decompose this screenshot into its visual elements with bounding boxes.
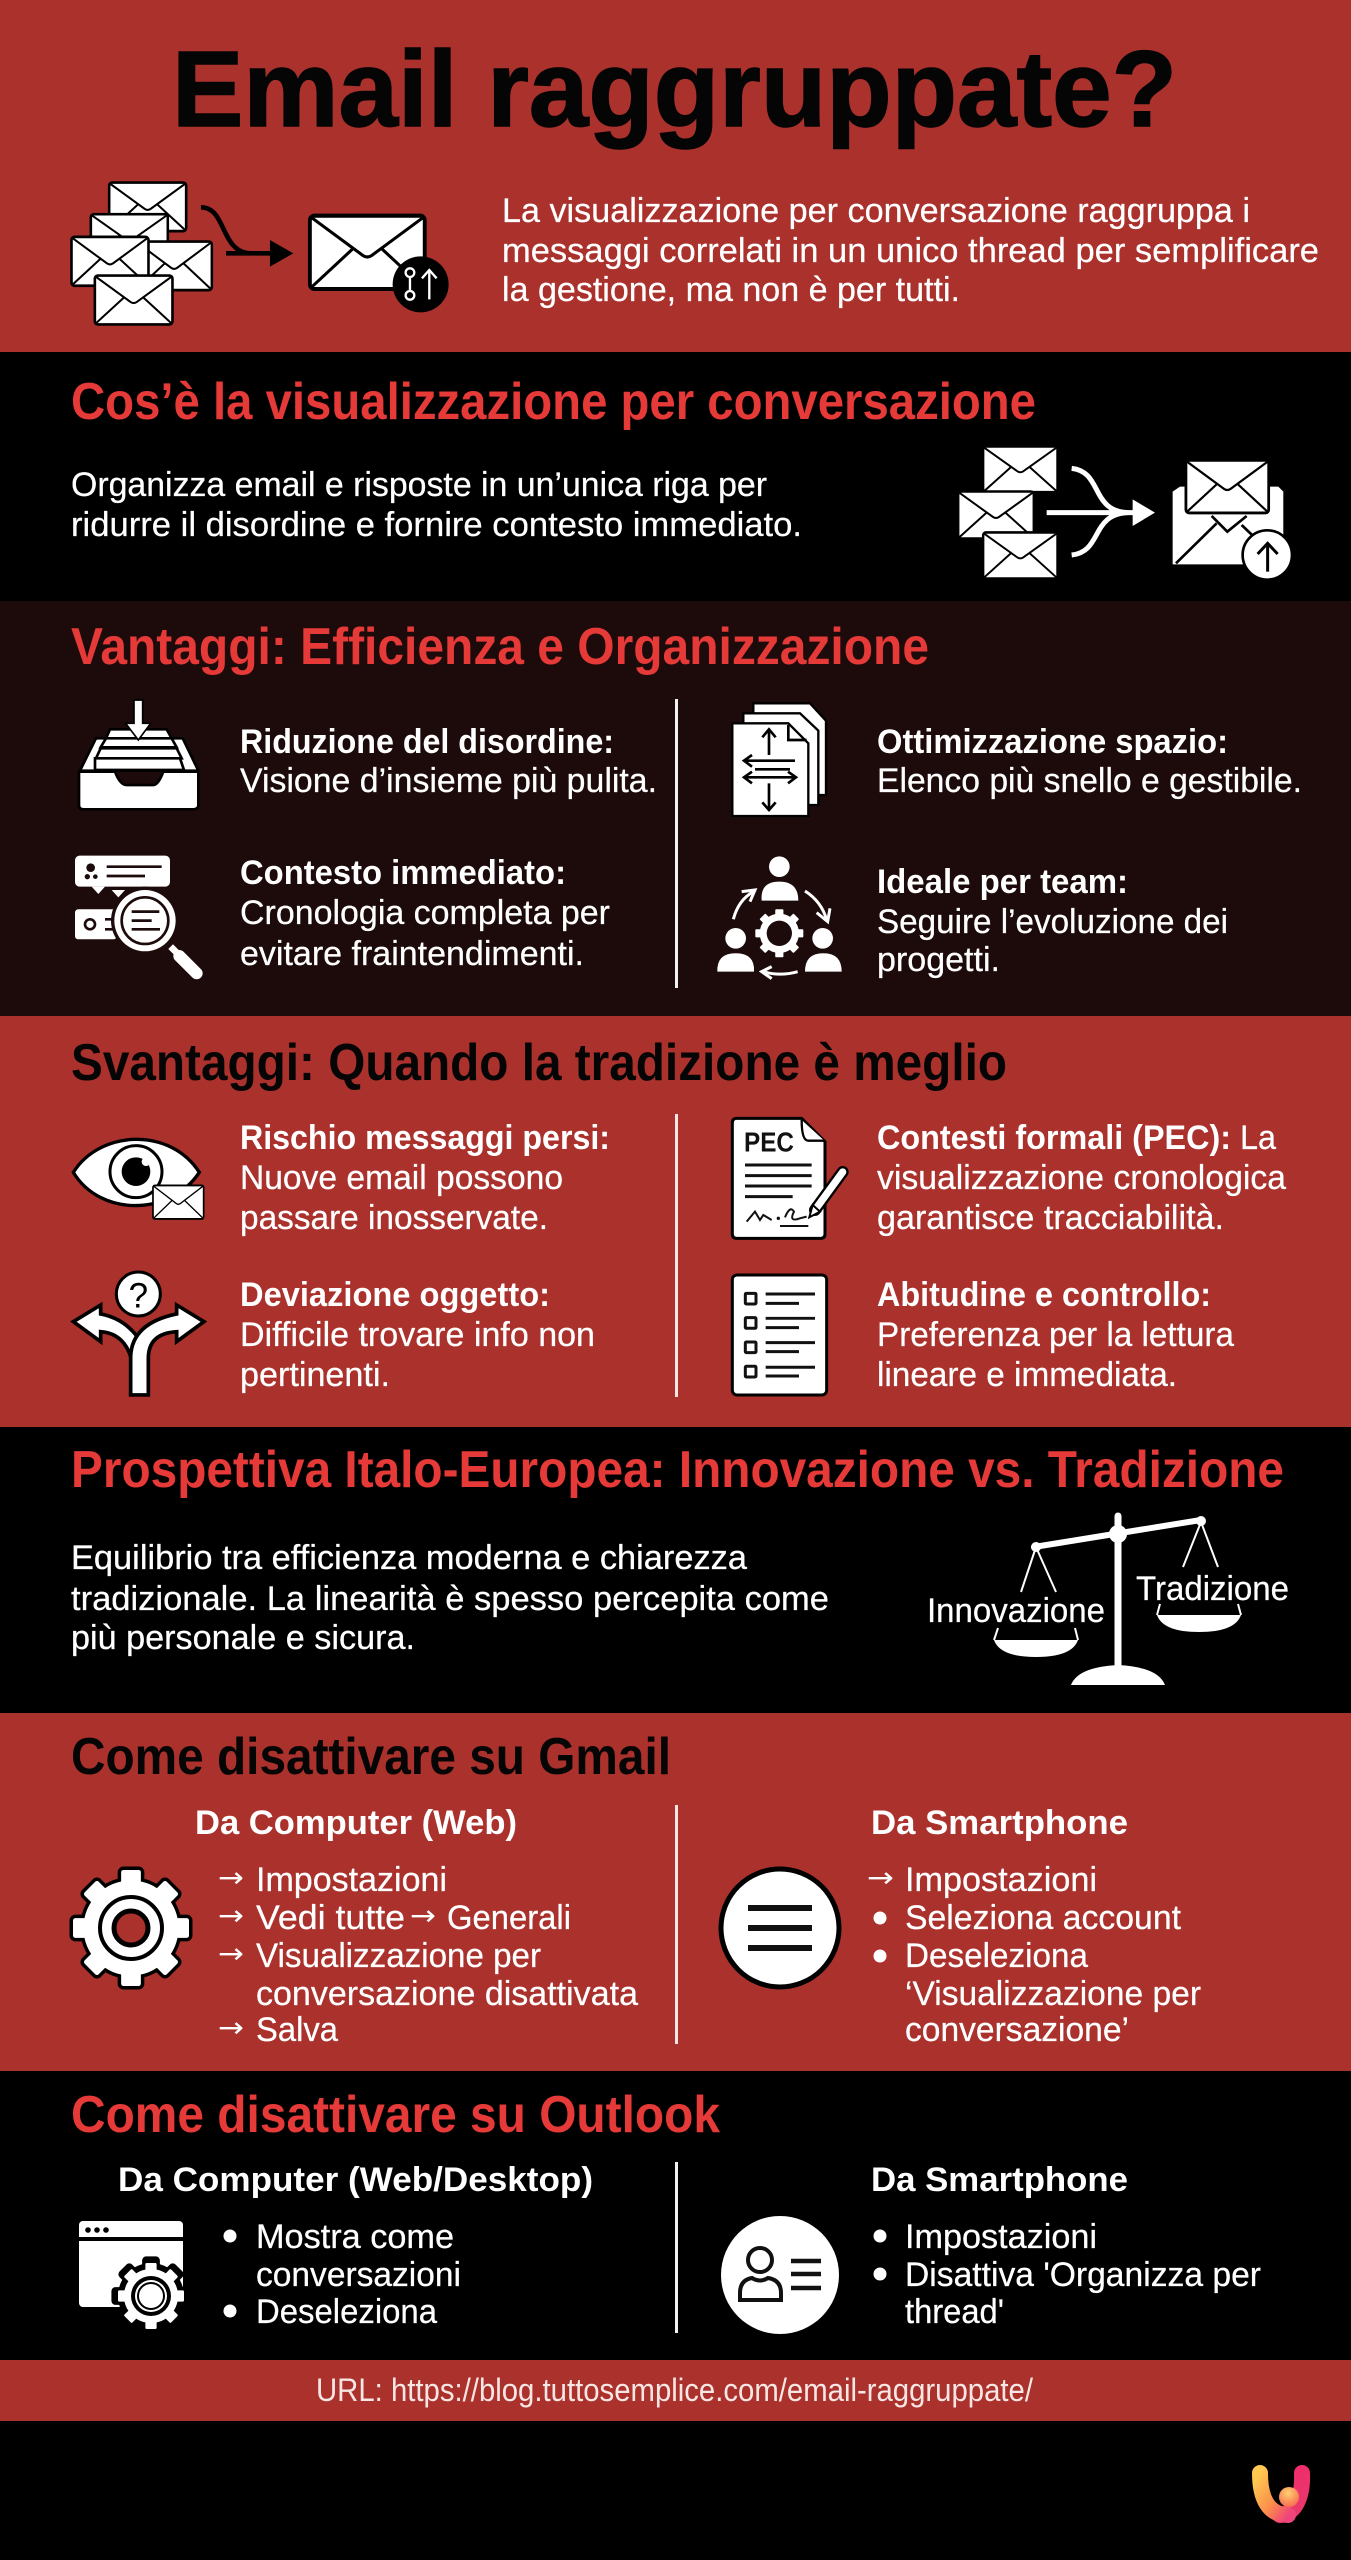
list: smartphone steps: →	[867, 1861, 894, 1894]
text: subject deviation: pertinenti.	[240, 1356, 390, 1394]
panel: advantages	[0, 601, 1351, 1016]
text: reduction of clutter: Visione d’insieme più pulita.	[240, 762, 657, 800]
list: smartphone steps: Deseleziona	[905, 1937, 1088, 1975]
list: computer steps: Visualizzazione per	[256, 1937, 541, 1975]
text: immediate context	[240, 854, 610, 973]
list: smartphone steps: ‘Visualizzazione per	[905, 1975, 1201, 2013]
icon: menu circle	[721, 1869, 839, 1987]
text: formal contexts: La	[1240, 1119, 1276, 1157]
body text: tradizionale. La linearità è spesso percepita come	[71, 1580, 829, 1618]
panel: URL bar	[0, 2360, 1351, 2421]
icon: window with gear	[79, 2221, 188, 2333]
icon: merging emails	[958, 446, 1292, 580]
text: formal contexts: visualizzazione cronologica	[877, 1159, 1286, 1197]
text: habit and control: lineare e immediata.	[877, 1356, 1177, 1394]
list: computer steps: →	[218, 1861, 244, 1894]
subheading: smartphone: Da Smartphone	[871, 2161, 1128, 2199]
panel: Italian-European perspective	[0, 1427, 1351, 1713]
icon: forked arrows with question mark	[73, 1272, 204, 1395]
intro text: messaggi correlati in un unico thread per semplificare	[502, 232, 1319, 270]
text: space optimisation: Ottimizzazione spazio:	[877, 723, 1228, 761]
text: ideal for teams: progetti.	[877, 941, 1000, 979]
list: computer steps	[218, 1861, 638, 2049]
list: computer steps	[224, 2218, 461, 2331]
intro text: la gestione, ma non è per tutti.	[502, 271, 960, 309]
panel: disadvantages	[0, 1016, 1351, 1427]
text: habit and control	[877, 1276, 1234, 1394]
intro text: La visualizzazione per conversazione raggruppa i	[502, 192, 1250, 230]
icon: emails grouped into a thread	[71, 183, 449, 324]
text: space optimisation: Elenco più snello e gestibile.	[877, 762, 1302, 800]
subheading: smartphone: Da Smartphone	[871, 1804, 1128, 1842]
icon: balance scale: Innovazione	[927, 1592, 1105, 1630]
icon: balance scale	[927, 1516, 1289, 1685]
text: subject deviation: Difficile trovare info non	[240, 1316, 595, 1354]
text: risk of lost messages: passare inosservate.	[240, 1199, 548, 1237]
list: computer steps: Vedi tutte	[256, 1899, 405, 1937]
list: computer steps: Deseleziona	[256, 2293, 437, 2331]
text: formal contexts: garantisce tracciabilità.	[877, 1199, 1224, 1237]
intro text	[502, 192, 1319, 309]
list: smartphone steps: Seleziona account	[905, 1899, 1182, 1937]
icon: context magnifier	[75, 856, 197, 973]
icon: settings gear	[73, 1870, 189, 1986]
list: computer steps: Impostazioni	[256, 1861, 447, 1899]
text: subject deviation	[240, 1276, 595, 1394]
text: formal contexts	[877, 1119, 1286, 1237]
body text	[71, 466, 802, 544]
subheading: computer: Da Computer (Web)	[195, 1804, 517, 1842]
text: reduction of clutter	[240, 723, 657, 800]
heading: Come disattivare su Gmail	[71, 1728, 671, 1786]
icon: logo	[1260, 2473, 1302, 2515]
text: risk of lost messages: Rischio messaggi persi:	[240, 1119, 610, 1157]
panel: header	[0, 0, 1351, 352]
icon: team with gear	[717, 856, 842, 979]
icon: PEC document with pen	[732, 1118, 843, 1238]
icon: stacked documents	[732, 703, 826, 816]
heading: Come disattivare su Outlook	[71, 2086, 720, 2144]
list: computer steps: →	[218, 1937, 244, 1970]
icon: checklist	[732, 1275, 827, 1395]
text: immediate context: Contesto immediato:	[240, 854, 566, 892]
text: ideal for teams: Ideale per team:	[877, 863, 1128, 901]
list: computer steps: →	[218, 2011, 244, 2044]
panel: disable on Gmail	[0, 1713, 1351, 2071]
list: smartphone steps: Impostazioni	[905, 2218, 1097, 2256]
text: risk of lost messages	[240, 1119, 610, 1237]
text: immediate context: Cronologia completa per	[240, 894, 610, 932]
text: space optimisation	[877, 723, 1302, 800]
list: smartphone steps: thread'	[905, 2293, 1004, 2331]
heading: Vantaggi: Efficienza e Organizzazione	[71, 618, 929, 676]
body text: Organizza email e risposte in un’unica riga per	[71, 466, 767, 504]
text: formal contexts: Contesti formali (PEC):	[877, 1119, 1231, 1157]
body text	[71, 1539, 829, 1657]
url text: URL: https://blog.tuttosemplice.com/email-raggruppate/	[316, 2372, 1033, 2408]
panel: disable on Outlook	[0, 2071, 1351, 2360]
title: Email raggruppate?	[172, 28, 1177, 149]
icon: inbox tray	[79, 700, 198, 809]
icon: profile circle	[721, 2216, 839, 2334]
heading: Svantaggi: Quando la tradizione è meglio	[71, 1034, 1007, 1092]
panel: what is conversation view	[0, 352, 1351, 601]
list: computer steps: conversazioni	[256, 2256, 461, 2294]
heading: Cos’è la visualizzazione per conversazione	[71, 373, 1036, 431]
icon: forked arrows with question mark: ?	[129, 1276, 148, 1315]
body text: Equilibrio tra efficienza moderna e chiarezza	[71, 1539, 747, 1577]
subheading: computer: Da Computer (Web/Desktop)	[118, 2161, 593, 2199]
text: ideal for teams: Seguire l’evoluzione dei	[877, 903, 1228, 941]
list: computer steps: →	[218, 1899, 244, 1932]
text: reduction of clutter: Riduzione del disordine:	[240, 723, 614, 761]
text: subject deviation: Deviazione oggetto:	[240, 1276, 550, 1314]
list: computer steps: Salva	[256, 2011, 338, 2049]
icon: PEC document with pen: PEC	[744, 1127, 794, 1158]
list: smartphone steps: conversazione’	[905, 2011, 1129, 2049]
text: ideal for teams	[877, 863, 1228, 979]
list: computer steps: Mostra come	[256, 2218, 454, 2256]
text: habit and control: Abitudine e controllo:	[877, 1276, 1211, 1314]
list: computer steps: →	[410, 1899, 436, 1932]
icon: balance scale: Tradizione	[1136, 1570, 1289, 1608]
list: computer steps: conversazione disattivata	[256, 1975, 638, 2013]
body text: ridurre il disordine e fornire contesto immediato.	[71, 506, 802, 544]
text: habit and control: Preferenza per la lettura	[877, 1316, 1234, 1354]
list: smartphone steps	[867, 1861, 1201, 2049]
footer background	[0, 2421, 1351, 2560]
list: smartphone steps: Disattiva 'Organizza per	[905, 2256, 1261, 2294]
icon: eye with envelope	[73, 1139, 204, 1219]
text: immediate context: evitare fraintendimenti.	[240, 935, 584, 973]
list: computer steps: Generali	[447, 1899, 571, 1937]
list: smartphone steps	[874, 2218, 1261, 2331]
body text: più personale e sicura.	[71, 1619, 415, 1657]
text: risk of lost messages: Nuove email possono	[240, 1159, 563, 1197]
list: smartphone steps: Impostazioni	[905, 1861, 1097, 1899]
